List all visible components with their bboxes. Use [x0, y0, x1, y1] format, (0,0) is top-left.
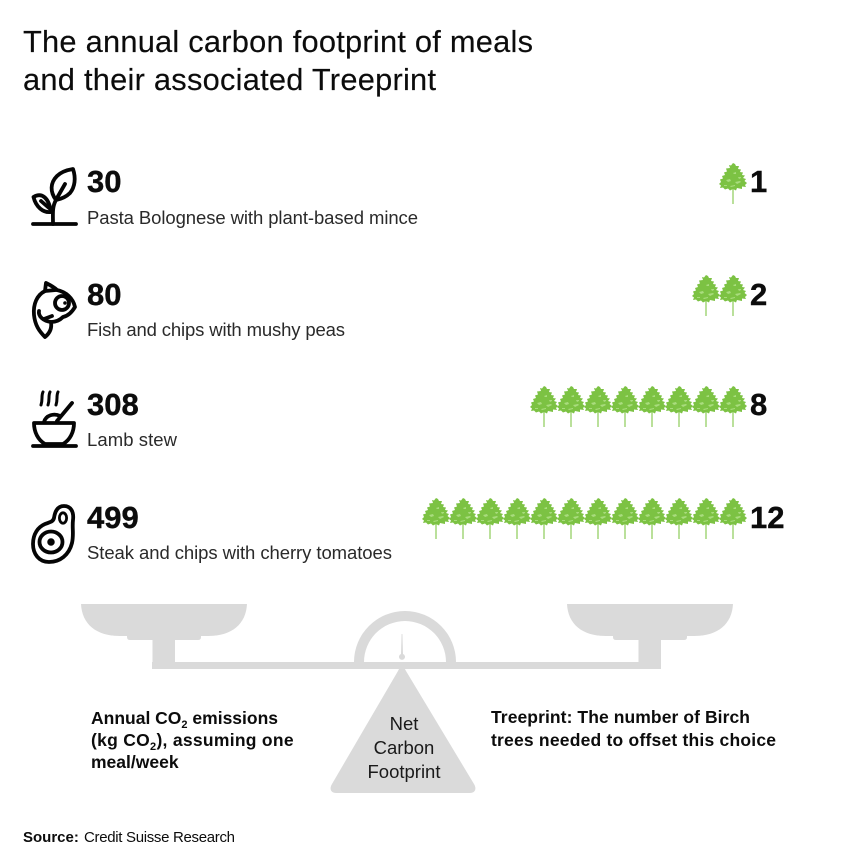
row: pasta bolognese — [33, 163, 767, 228]
fulcrum label: Footprint — [367, 761, 441, 782]
label: steak: Steak and chips with cherry tomatoes — [87, 542, 392, 563]
row: lamb stew — [33, 386, 767, 450]
count: 1: 1 — [750, 164, 767, 199]
needle — [399, 634, 405, 660]
value: 30: 30 — [87, 164, 121, 199]
row: steak — [33, 498, 784, 563]
trees: 8 — [530, 386, 747, 427]
title — [23, 24, 533, 97]
fulcrum triangle — [331, 667, 475, 793]
caption: annual CO2 emissions: emissions — [188, 708, 278, 728]
icon: plant — [33, 169, 76, 224]
trees: 12 — [422, 498, 747, 539]
source: Credit Suisse Research — [84, 829, 235, 846]
value: 308: 308 — [87, 387, 139, 422]
caption: treeprint: Treeprint: The number of Birch — [491, 707, 750, 727]
trees: 1 — [719, 163, 747, 204]
fulcrum label — [367, 713, 441, 782]
count: 8: 8 — [750, 387, 767, 422]
caption: annual CO2 emissions: 2 — [181, 719, 188, 731]
label: lamb: Lamb stew — [87, 429, 178, 450]
label: fish: Fish and chips with mushy peas — [87, 319, 345, 340]
caption: treeprint: trees needed to offset this choice — [491, 730, 776, 750]
trees: 2 — [692, 275, 747, 316]
dial arc — [354, 611, 456, 662]
source: Source: — [23, 829, 79, 846]
beam — [152, 640, 661, 669]
caption: annual CO2 emissions: Annual CO — [91, 708, 181, 728]
caption: annual CO2 emissions: ), assuming one — [156, 730, 294, 750]
caption: annual CO2 emissions — [91, 708, 294, 772]
title: The annual carbon footprint of meals — [23, 24, 533, 59]
value: 499: 499 — [87, 500, 139, 535]
icon: steak — [33, 506, 73, 562]
fulcrum label: Net — [390, 713, 418, 734]
caption: annual CO2 emissions: 2 — [150, 741, 156, 753]
row: fish and chips — [34, 275, 767, 340]
icon: bowl — [33, 392, 76, 446]
value: 80: 80 — [87, 277, 121, 312]
count: 12: 12 — [750, 500, 784, 535]
caption: treeprint — [491, 707, 776, 750]
title: and their associated Treeprint — [23, 62, 436, 97]
caption: annual CO2 emissions: meal/week — [91, 752, 179, 772]
left pan — [81, 604, 247, 640]
icon: fish — [34, 283, 75, 337]
right pan — [567, 604, 733, 640]
caption: annual CO2 emissions: (kg CO — [91, 730, 150, 750]
count: 2: 2 — [750, 277, 767, 312]
balance scale — [81, 604, 733, 793]
label: pasta: Pasta Bolognese with plant-based mince — [87, 207, 418, 228]
fulcrum label: Carbon — [374, 737, 434, 758]
